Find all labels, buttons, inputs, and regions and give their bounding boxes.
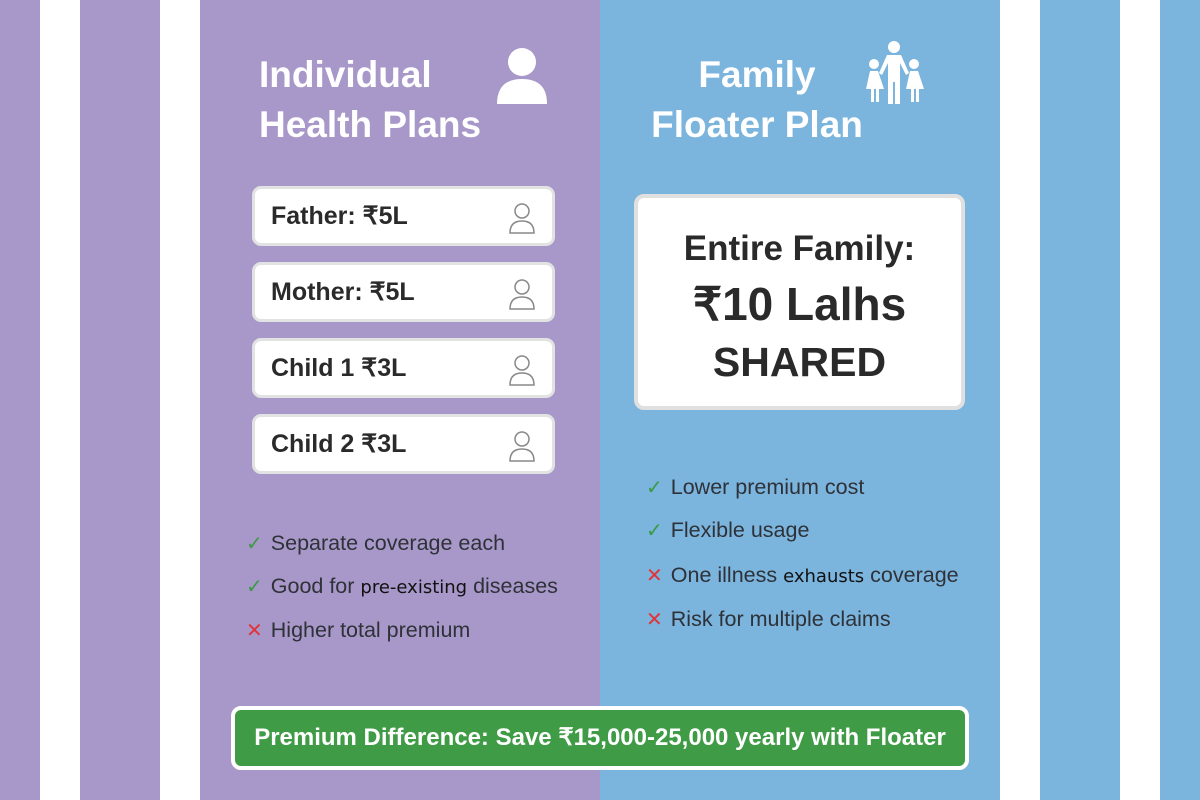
card: father: Father: ₹5L — [271, 202, 408, 230]
banner: premium difference: Premium Difference: Save ₹15,000-25,000 yearly with Floater — [254, 724, 946, 751]
card: entire family: Entire Family: — [684, 229, 915, 268]
checklist: floater: ✓ Lower premium cost — [646, 475, 864, 499]
card: entire family: SHARED — [713, 339, 886, 385]
checklist: floater: ✕ Risk for multiple claims — [646, 607, 891, 631]
title: family — [651, 54, 863, 145]
checklist: individual: ✕ Higher total premium — [246, 618, 470, 642]
card: child 2 — [252, 414, 555, 474]
icon: person — [497, 48, 547, 104]
title: family: Family — [698, 54, 816, 95]
card: entire family: ₹10 Lalhs — [693, 278, 906, 330]
card: entire family — [634, 194, 965, 410]
card: mother: Mother: ₹5L — [271, 278, 415, 306]
checklist: individual: ✓ Separate coverage each — [246, 531, 505, 555]
checklist: floater: ✓ Flexible usage — [646, 518, 809, 542]
title: individual: Health Plans — [259, 104, 481, 145]
title: individual — [259, 54, 481, 145]
card: child 1: Child 1 ₹3L — [271, 354, 406, 382]
icon: family — [866, 41, 924, 104]
card: mother — [252, 262, 555, 322]
card: child 2: Child 2 ₹3L — [271, 430, 406, 458]
checklist: floater — [646, 475, 959, 631]
card: father — [252, 186, 555, 246]
checklist: individual: ✓ Good for pre-existing diseases — [246, 574, 558, 598]
banner: premium difference — [231, 706, 969, 770]
title: individual: Individual — [259, 54, 432, 95]
checklist: floater: ✕ One illness exhausts coverage — [646, 563, 959, 587]
title: family: Floater Plan — [651, 104, 863, 145]
checklist: individual — [246, 531, 558, 642]
card: child 1 — [252, 338, 555, 398]
